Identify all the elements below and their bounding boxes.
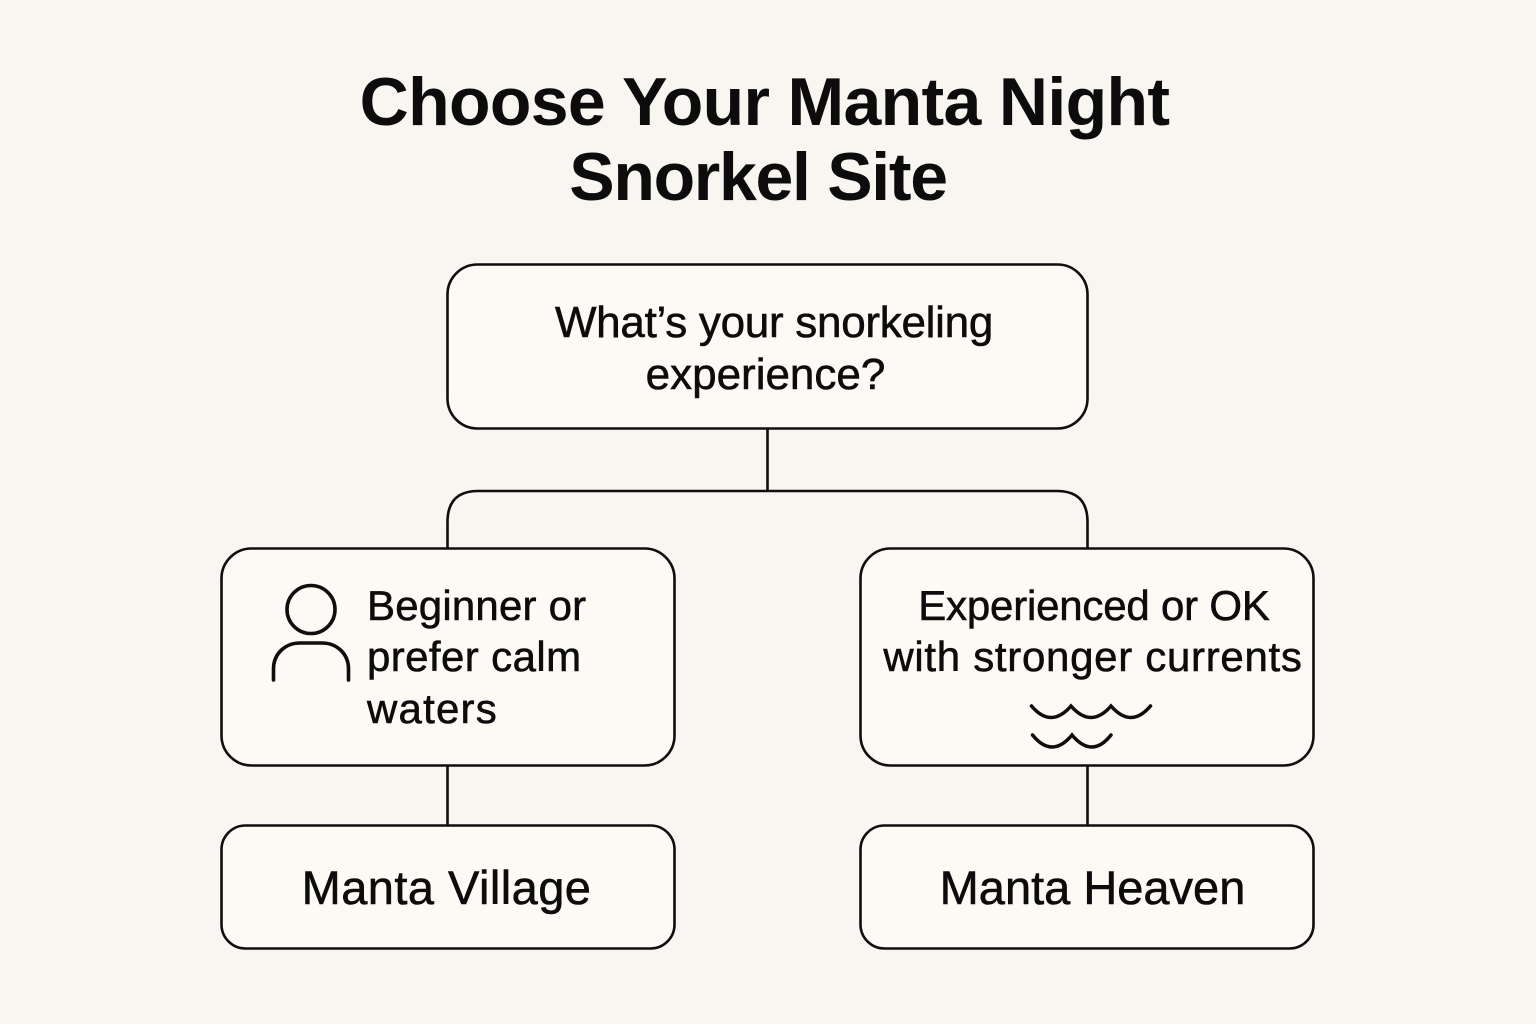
beginner text: prefer calm [367,633,581,680]
panel: question box [448,264,1088,428]
title [360,64,1170,215]
icon: waves [1032,706,1150,747]
connector: experienced to Manta Heaven [1086,766,1089,825]
experienced text [883,582,1303,680]
title: Choose Your Manta Night [360,64,1169,140]
question text: What’s your snorkeling [555,298,993,347]
experienced text: with stronger currents [883,633,1303,680]
beginner text: Beginner or [367,582,586,628]
panel: Manta Heaven box [860,826,1314,948]
result: Manta Heaven: Manta Heaven [940,861,1245,914]
beginner text [366,582,586,732]
question text: experience? [646,350,885,399]
experienced text: Experienced or OK [918,582,1270,628]
question text [554,298,993,399]
connector: question to branches [448,429,1088,548]
connector: beginner to Manta Village [446,766,449,825]
panel: experienced box [860,548,1314,766]
beginner text: waters [367,684,498,732]
panel: beginner box [222,548,674,766]
icon: person [274,586,348,680]
result: Manta Village: Manta Village [302,861,591,914]
panel: Manta Village box [222,826,674,948]
title: Snorkel Site [569,139,947,215]
